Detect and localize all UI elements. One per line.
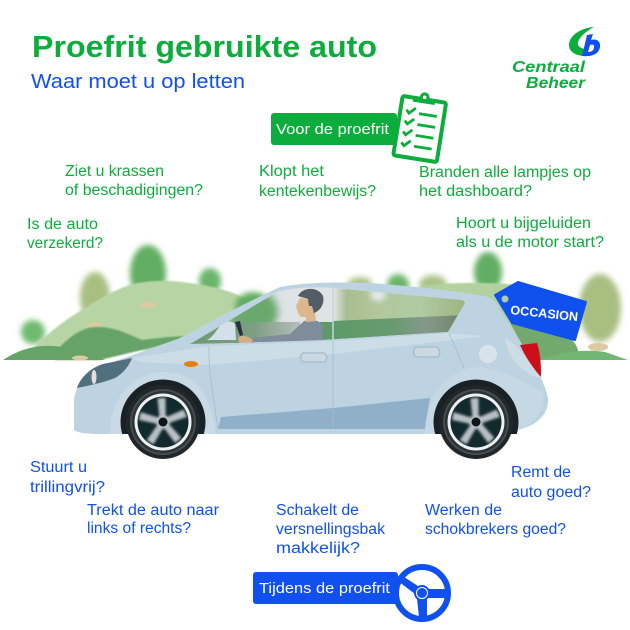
icon: clipboard checklist	[393, 89, 447, 162]
question: links of rechts: Trekt de auto naar	[87, 502, 219, 519]
question: remt: Remt de	[511, 464, 571, 481]
logo: Centraal Beheer: Centraal	[512, 59, 586, 76]
question: versnellingsbak: versnellingsbak	[276, 521, 385, 538]
price tag: occasion: OCCASION	[510, 303, 579, 324]
question: remt: auto goed?	[511, 484, 591, 501]
question: trillingvrij: Stuurt u	[30, 459, 87, 476]
headlight	[77, 358, 132, 388]
button: Voor de proefrit	[271, 113, 397, 145]
door handles	[300, 353, 327, 362]
subtitle: Waar moet u op letten	[31, 71, 245, 93]
upper body highlight	[132, 333, 485, 365]
icon: steering wheel	[396, 567, 448, 619]
title: Proefrit gebruikte auto	[32, 29, 377, 64]
background: landscape with hills and trees	[3, 245, 628, 360]
question: versnellingsbak: Schakelt de	[276, 502, 359, 519]
rear wheel	[434, 380, 518, 464]
question: versnellingsbak: makkelijk?	[276, 540, 360, 557]
question: trillingvrij: trillingvrij?	[30, 479, 105, 496]
steering wheel	[235, 321, 243, 336]
logo: Centraal Beheer: Beheer	[526, 75, 586, 92]
windows with blurred landscape	[190, 288, 465, 344]
question: lampjes: Branden alle lampjes op	[419, 164, 591, 181]
mirror	[207, 322, 236, 340]
logo: Centraal Beheer	[512, 27, 600, 92]
car body	[74, 282, 548, 434]
question: kentekenbewijs: Klopt het	[259, 163, 325, 180]
headlight lens	[92, 370, 96, 384]
button: Tijdens de proefrit	[253, 572, 398, 604]
question: lampjes: het dashboard?	[419, 183, 532, 200]
driver	[238, 289, 323, 343]
question: schokbrekers: Werken de	[425, 502, 502, 519]
pillar between windows	[332, 287, 334, 341]
question: krassen: Ziet u krassen	[65, 163, 164, 180]
question: links of rechts: links of rechts?	[87, 520, 191, 537]
question: verzekerd: verzekerd?	[27, 235, 103, 252]
indicator	[184, 361, 198, 367]
tail light	[520, 343, 541, 377]
question: krassen: of beschadigingen?	[65, 182, 203, 199]
fuel cap	[479, 345, 497, 363]
price tag: occasion	[495, 282, 586, 340]
question: bijgeluiden: Hoort u bijgeluiden	[456, 215, 591, 232]
door seams	[209, 333, 464, 429]
lower sill	[218, 398, 430, 429]
question: bijgeluiden: als u de motor start?	[456, 234, 604, 251]
rear bumper highlight	[505, 338, 541, 378]
fender flares	[110, 372, 216, 434]
button: Voor de proefrit: Voor de proefrit	[276, 121, 390, 138]
car	[74, 282, 548, 464]
front wheel	[120, 380, 206, 464]
question: schokbrekers: schokbrekers goed?	[425, 521, 566, 538]
question: verzekerd: Is de auto	[27, 216, 98, 233]
button: Tijdens de proefrit: Tijdens de proefrit	[259, 580, 391, 597]
question: kentekenbewijs: kentekenbewijs?	[259, 183, 376, 200]
